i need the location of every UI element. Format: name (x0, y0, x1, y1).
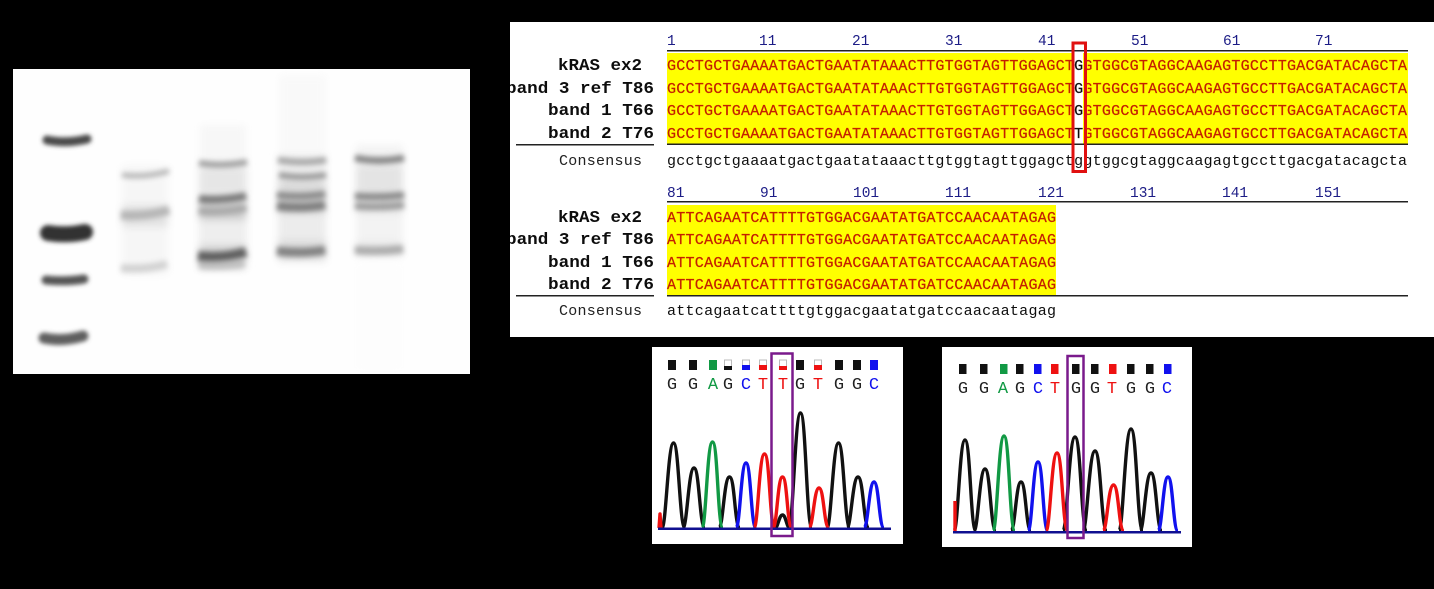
sequence row: kRAS ex2 (559, 58, 1408, 70)
sequence row: band 1 T66 (549, 255, 1056, 268)
position numbers row 1: 41 (1038, 34, 1055, 50)
lane smears (120, 148, 405, 272)
position numbers row 1: 71 (1315, 34, 1332, 50)
marker ladder bands (44, 139, 87, 340)
base calls: G (1090, 380, 1100, 399)
base calls: C (1033, 380, 1043, 399)
sequence row: kRAS ex2: kRAS ex2 (558, 56, 642, 75)
consensus row 2: attcagaatcattttgtggacgaatatgatccaacaatagag (667, 303, 1056, 320)
panel: electrophoresis gel (13, 69, 470, 374)
base calls: G (667, 376, 677, 395)
base calls: A (708, 376, 719, 395)
panel: sequence alignment (506, 22, 1434, 337)
base calls: G (979, 380, 989, 399)
base calls: C (1162, 380, 1172, 399)
base calls: A (998, 380, 1009, 399)
consensus row 1: gcctgctgaaaatgactgaatataaacttgtggtagttggagctggtggcgtaggcaagagtgccttgacgatacagcta (667, 153, 1407, 170)
sequence row: kRAS ex2 (559, 210, 1056, 222)
sequence row: band 3 ref T86: band 3 ref T86 (506, 230, 654, 249)
consensus row 2: Consensus (559, 303, 642, 320)
base calls (958, 380, 1172, 399)
sequence row: band 1 T66: GCCTGCTGAAAATGACTGAATATAAACTTGTGGTAGTTGGAGCTGGTGGCGTAGGCAAGAGTGCCTTGACGATACAGCTA (667, 103, 1407, 120)
quality squares (959, 364, 1172, 374)
consensus row 1 (560, 155, 1406, 168)
position numbers row 2: 81 (667, 186, 684, 202)
lane 3 bands (277, 160, 326, 252)
sequence row: kRAS ex2: GCCTGCTGAAAATGACTGAATATAAACTTGTGGTAGTTGGAGCTGGTGGCGTAGGCAAGAGTGCCTTGACGATACAGCTA (667, 58, 1407, 75)
sequence row: band 1 T66 (549, 103, 1408, 116)
base calls: C (741, 376, 751, 395)
base calls: G (1126, 380, 1136, 399)
position numbers row 2: 91 (760, 186, 777, 202)
base calls: G (688, 376, 698, 395)
purple highlight box (772, 354, 792, 536)
position numbers row 1: 31 (945, 34, 962, 50)
base calls: T (778, 376, 788, 395)
lane 2 bands (198, 162, 247, 266)
sequence row: band 2 T76: band 2 T76 (548, 275, 654, 294)
sequence row: band 3 ref T86 (510, 232, 1056, 244)
sequence row: band 3 ref T86: ATTCAGAATCATTTTGTGGACGAATATGATCCAACAATAGAG (667, 232, 1056, 249)
base calls: T (813, 376, 823, 395)
position numbers row 2: 121 (1038, 186, 1064, 202)
red mutation box (1073, 43, 1086, 172)
base calls: G (795, 376, 805, 395)
position numbers row 1 (668, 35, 1332, 45)
sequence row: kRAS ex2: ATTCAGAATCATTTTGTGGACGAATATGATCCAACAATAGAG (667, 210, 1056, 227)
sequence row: kRAS ex2: kRAS ex2 (558, 208, 642, 227)
sequence row: band 2 T76 (549, 277, 1056, 290)
base calls: G (1145, 380, 1155, 399)
trace baseline (658, 528, 891, 530)
sequence row: band 2 T76: ATTCAGAATCATTTTGTGGACGAATATGATCCAACAATAGAG (667, 277, 1056, 294)
sequence row: band 1 T66: band 1 T66 (548, 101, 654, 120)
position numbers row 1: 1 (667, 34, 676, 50)
base calls: G (1015, 380, 1025, 399)
base calls: T (758, 376, 768, 395)
position numbers row 1: 11 (759, 34, 776, 50)
sequence row: band 1 T66: ATTCAGAATCATTTTGTGGACGAATATGATCCAACAATAGAG (667, 255, 1056, 272)
position numbers row 1: 51 (1131, 34, 1148, 50)
alignment block 2 (506, 186, 1408, 320)
purple highlight box (1068, 356, 1084, 538)
consensus row 2 (560, 305, 1055, 318)
panel: chromatogram mutant T (652, 347, 903, 544)
alignment block 1 (506, 34, 1408, 172)
position numbers row 2: 151 (1315, 186, 1341, 202)
position numbers row 2: 131 (1130, 186, 1156, 202)
sequence row: band 3 ref T86: GCCTGCTGAAAATGACTGAATATAAACTTGTGGTAGTTGGAGCTGGTGGCGTAGGCAAGAGTGCCTTGACGATACAGCTA (667, 81, 1407, 98)
yellow conservation highlight (667, 205, 1056, 295)
trace peaks (659, 413, 884, 528)
trace baseline (953, 531, 1181, 534)
sequence row: band 2 T76: band 2 T76 (548, 124, 654, 143)
quality squares (668, 360, 878, 370)
base calls: G (1071, 380, 1081, 399)
position numbers row 1: 61 (1223, 34, 1240, 50)
position numbers row 2: 101 (853, 186, 879, 202)
sequence row: band 2 T76: GCCTGCTGAAAATGACTGAATATAAACTTGTGGTAGTTGGAGCTTGTGGCGTAGGCAAGAGTGCCTTGACGATACAGCTA (667, 126, 1407, 143)
consensus row 1: Consensus (559, 153, 642, 170)
yellow conservation highlight (667, 53, 1408, 144)
base calls: G (958, 380, 968, 399)
base calls: C (869, 376, 879, 395)
trace peaks (954, 429, 1178, 531)
base calls: G (834, 376, 844, 395)
position numbers row 2: 141 (1222, 186, 1248, 202)
sequence row: band 2 T76 (549, 126, 1408, 138)
lane 4 bands (355, 158, 404, 251)
position numbers row 2: 111 (945, 186, 971, 202)
base calls: T (1050, 380, 1060, 399)
base calls (667, 376, 879, 395)
panel: chromatogram wild type G (942, 347, 1192, 547)
sequence row: band 1 T66: band 1 T66 (548, 253, 654, 272)
position numbers row 2 (668, 187, 1340, 197)
position numbers row 1: 21 (852, 34, 869, 50)
lane 1 bands (121, 171, 169, 268)
base calls: G (723, 376, 733, 395)
sequence row: band 3 ref T86: band 3 ref T86 (506, 79, 654, 98)
base calls: G (852, 376, 862, 395)
sequence row: band 3 ref T86 (510, 81, 1408, 94)
base calls: T (1107, 380, 1117, 399)
